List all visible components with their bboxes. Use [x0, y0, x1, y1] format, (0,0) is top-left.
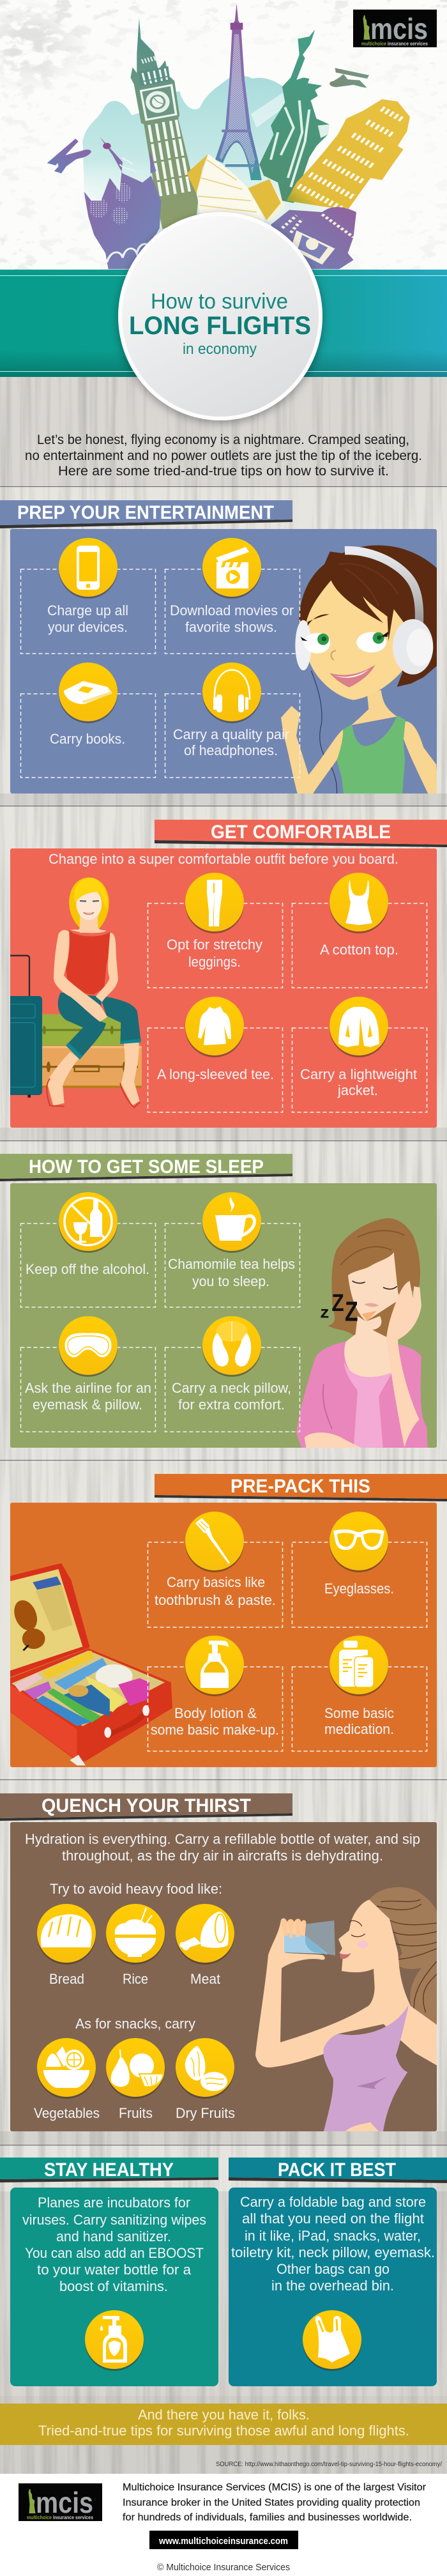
- panel: quench your thirst: Try to avoid heavy food like:: [50, 1881, 222, 1897]
- illustration: open red suitcase: [10, 1563, 172, 1765]
- panel: stay healthy: [10, 2188, 218, 2386]
- illustration: woman with headphones: [281, 546, 439, 795]
- tip: charge devices: Charge up all: [47, 602, 128, 618]
- biplane left: [47, 139, 91, 173]
- section heading: get comfortable: [155, 820, 447, 847]
- icon: fruits: Fruits: [119, 2105, 153, 2121]
- intro paragraph: Let’s be honest, flying economy is a nightmare. Cramped seating,: [37, 433, 409, 447]
- tip: download movies: favorite shows.: [185, 619, 277, 635]
- Onion-domed palace: [84, 137, 161, 269]
- section heading: prep your entertainment: [0, 500, 292, 528]
- icon: rice: Rice: [123, 1971, 148, 1987]
- tip: charge devices: your devices.: [48, 619, 128, 635]
- panel: pack it best: Other bags can go: [277, 2261, 390, 2277]
- panel: pack it best: in it like, iPad, snacks, water,: [245, 2228, 421, 2244]
- panel: prep your entertainment: [10, 529, 439, 795]
- closing band: And there you have it, folks.: [138, 2407, 310, 2423]
- section heading: get comfortable: GET COMFORTABLE: [211, 822, 391, 843]
- section heading: stay healthy: [0, 2158, 218, 2182]
- illustration: world landmarks: [47, 3, 410, 280]
- tip: headphones: of headphones.: [184, 742, 278, 758]
- Taj Mahal: [271, 207, 356, 269]
- panel: stay healthy: to your water bottle for a: [37, 2262, 192, 2278]
- tip: alcohol: Keep off the alcohol.: [26, 1261, 149, 1277]
- tip: eyemask: eyemask & pillow.: [33, 1397, 142, 1413]
- tip: headphones: Carry a quality pair: [173, 726, 289, 742]
- icon: dry fruits: Dry Fruits: [176, 2105, 235, 2121]
- tip: alcohol: [20, 1192, 156, 1307]
- about text: Multichoice Insurance Services (MCIS) is one of the largest Visitor: [123, 2482, 427, 2493]
- tip: long-sleeved tee: A long-sleeved tee.: [157, 1066, 274, 1082]
- cloud backdrop: [63, 76, 370, 280]
- section heading: pack it best: PACK IT BEST: [278, 2159, 396, 2181]
- Eiffel tower: [215, 3, 262, 180]
- panel: quench your thirst: throughout, as the dry air in aircrafts is dehydrating.: [62, 1848, 383, 1864]
- tip: eyemask: Ask the airline for an: [25, 1380, 151, 1396]
- Statue of Liberty: [259, 29, 330, 203]
- footer: [0, 2474, 447, 2576]
- illustration: woman sitting on suitcases: [4, 877, 142, 1107]
- icon: sanitizer bottle: [85, 2310, 144, 2371]
- title text: [129, 289, 311, 358]
- icon: fruits: [106, 2038, 165, 2121]
- tip: cotton top: [292, 873, 427, 988]
- tip: chamomile tea: [165, 1192, 300, 1307]
- illustration: woman drinking water: [255, 1887, 437, 2132]
- tip: cotton top: A cotton top.: [320, 942, 398, 958]
- Big Ben: [130, 19, 198, 229]
- zzz: [321, 1294, 358, 1321]
- panel: stay healthy: Planes are incubators for: [38, 2195, 190, 2211]
- tip: eyeglasses: Eyeglasses.: [324, 1581, 394, 1597]
- Opera house sails: [186, 154, 285, 221]
- section heading: stay healthy: STAY HEALTHY: [44, 2159, 174, 2181]
- tip: lightweight jacket: jacket.: [337, 1082, 378, 1098]
- about text: [123, 2482, 427, 2523]
- panel: get comfortable: [4, 848, 437, 1128]
- biplane right: [330, 68, 369, 88]
- tip: lightweight jacket: [292, 997, 427, 1112]
- closing band: [0, 2404, 447, 2445]
- tip: headphones: [165, 663, 300, 778]
- tip: medication: Some basic: [324, 1705, 394, 1721]
- section heading: prep your entertainment: PREP YOUR ENTERTAINMENT: [17, 502, 274, 523]
- zzz: z: [320, 1303, 329, 1322]
- tip: medication: [292, 1636, 427, 1751]
- tip: long-sleeved tee: [148, 997, 282, 1112]
- section heading: quench your thirst: QUENCH YOUR THIRST: [42, 1795, 251, 1816]
- copyright: © Multichoice Insurance Services: [157, 2562, 290, 2573]
- about text: Insurance broker in the United States providing quality protection: [123, 2497, 420, 2508]
- tip: download movies: [165, 538, 300, 654]
- section heading: quench your thirst: [0, 1793, 292, 1821]
- icon: plastic bag: [303, 2310, 361, 2371]
- panel: stay healthy: boost of vitamins.: [59, 2278, 168, 2294]
- page background: grunge white header: [0, 0, 447, 270]
- tip: toothbrush: toothbrush & paste.: [155, 1592, 276, 1608]
- tip: toothbrush: [148, 1512, 282, 1627]
- icon: vegetables: Vegetables: [34, 2105, 100, 2121]
- about text: for hundreds of individuals, families and businesses worldwide.: [123, 2512, 412, 2523]
- zzz: Z: [345, 1296, 358, 1328]
- title oval: [118, 212, 322, 420]
- tip: download movies: Download movies or: [170, 602, 294, 618]
- panel: stay healthy: You can also add an EBOOST: [25, 2245, 204, 2261]
- panel: pack it best: all that you need on the flight: [242, 2211, 424, 2227]
- tip: body lotion: some basic make-up.: [151, 1722, 279, 1738]
- logo top right: [353, 10, 437, 47]
- icon: bread: [37, 1904, 96, 1987]
- tip: leggings: leggings.: [188, 954, 241, 970]
- website button: www.multichoiceinsurance.com: [158, 2536, 288, 2547]
- panel: pack it best: in the overhead bin.: [271, 2278, 394, 2294]
- section heading: pack it best: [229, 2158, 447, 2183]
- title text: How to survive: [151, 289, 288, 314]
- panel: get comfortable: Change into a super comfortable outfit before you board.: [49, 851, 398, 867]
- title text: in economy: [183, 341, 257, 358]
- section heading: pre-pack this: PRE-PACK THIS: [231, 1476, 370, 1497]
- section heading: pre-pack this: [155, 1474, 447, 1501]
- tip: eyemask: [20, 1316, 156, 1432]
- panel: pack it best: Carry a foldable bag and store: [240, 2194, 426, 2210]
- intro paragraph: Here are some tried-and-true tips on how to survive it.: [58, 464, 389, 479]
- tip: chamomile tea: you to sleep.: [192, 1273, 269, 1289]
- tip: charge devices: [20, 538, 156, 654]
- icon: vegetables: [34, 2038, 100, 2121]
- panel: pack it best: toiletry kit, neck pillow, eyemask.: [231, 2244, 435, 2260]
- footer logo: [19, 2483, 102, 2521]
- panel: stay healthy: viruses. Carry sanitizing wipes: [22, 2212, 206, 2228]
- panel: quench your thirst: [10, 1822, 437, 2132]
- icon: bread: Bread: [49, 1971, 84, 1987]
- tip: leggings: [148, 873, 282, 988]
- icon: rice: [106, 1904, 165, 1987]
- panel: quench your thirst: As for snacks, carry: [75, 2016, 195, 2032]
- tip: neck pillow: [165, 1316, 300, 1432]
- tip: carry books: [20, 663, 156, 778]
- tip: leggings: Opt for stretchy: [167, 937, 262, 953]
- tip: lightweight jacket: Carry a lightweight: [300, 1066, 417, 1082]
- website button: [149, 2531, 298, 2549]
- tip: neck pillow: Carry a neck pillow,: [172, 1380, 291, 1396]
- panel: quench your thirst: Hydration is everything. Carry a refillable bottle of water, and sip: [25, 1831, 420, 1847]
- section heading: how to get some sleep: HOW TO GET SOME SLEEP: [29, 1156, 264, 1177]
- panel: stay healthy: and hand sanitizer.: [56, 2228, 171, 2244]
- icon: meat: Meat: [190, 1971, 220, 1987]
- tip: medication: medication.: [324, 1721, 394, 1737]
- panel: how to get some sleep: [10, 1183, 437, 1450]
- icon: meat: [176, 1904, 234, 1987]
- closing band: Tried-and-true tips for surviving those awful and long flights.: [38, 2423, 409, 2439]
- Leaning Tower of Pisa: [287, 99, 410, 211]
- tip: body lotion: Body lotion &: [174, 1705, 257, 1721]
- zzz: Z: [331, 1289, 344, 1317]
- tip: toothbrush: Carry basics like: [167, 1574, 265, 1590]
- tip: neck pillow: for extra comfort.: [178, 1397, 285, 1413]
- section heading: how to get some sleep: [0, 1154, 292, 1181]
- intro paragraph: [25, 433, 422, 479]
- intro paragraph: no entertainment and no power outlets are just the tip of the iceberg.: [25, 448, 422, 463]
- title band: [0, 270, 447, 377]
- panel: pack it best: [229, 2188, 437, 2386]
- title text: LONG FLIGHTS: [129, 312, 311, 340]
- tip: chamomile tea: Chamomile tea helps: [168, 1256, 295, 1272]
- illustration: sleepy woman: [296, 1218, 428, 1450]
- tip: body lotion: [148, 1636, 282, 1751]
- tip: eyeglasses: [292, 1512, 427, 1627]
- tip: carry books: Carry books.: [50, 731, 125, 747]
- icon: dry fruits: [176, 2038, 235, 2121]
- panel: pre-pack this: [10, 1503, 437, 1767]
